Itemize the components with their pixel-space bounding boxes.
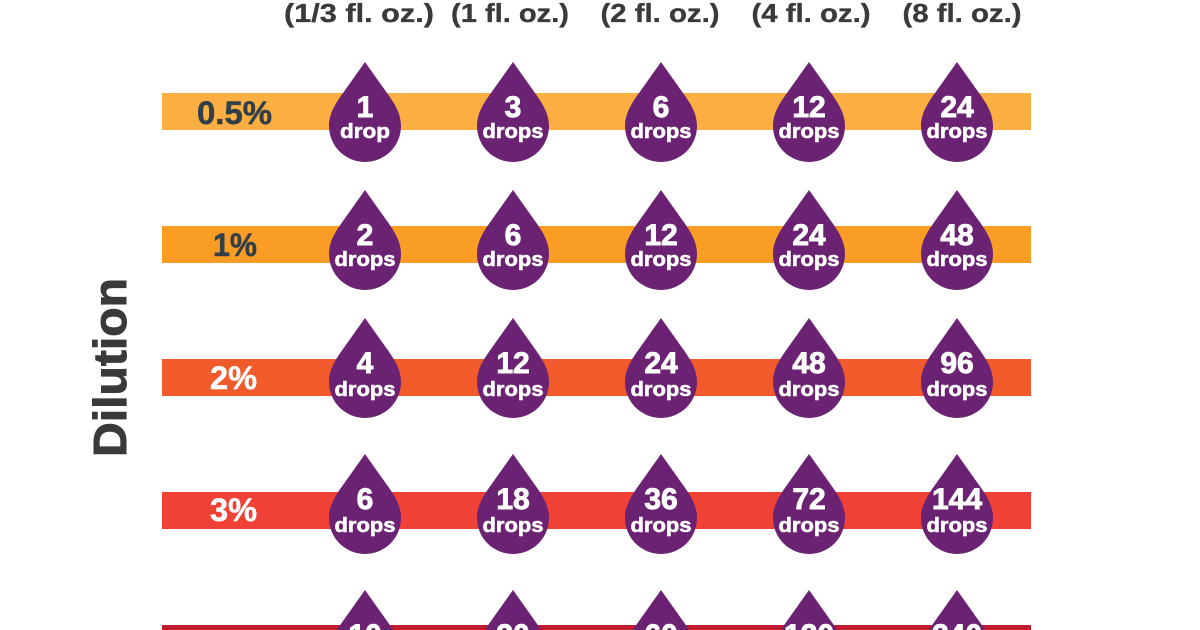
row: 1% dilution: 24 [792,219,826,252]
row: 3% dilution [162,454,1031,554]
row: 2% dilution: 12 [496,347,530,380]
row: 0.5% dilution [162,62,1031,162]
axis title: Dilution: Dilution [84,278,136,457]
row: 1% dilution: drops [334,249,396,271]
row: 0.5% dilution: 0.5% [197,95,272,131]
row: 2% dilution: 2% [210,360,257,396]
row: 2% dilution: 4 [357,347,374,380]
row: 3% dilution: 18 [496,483,530,516]
row: 0.5% dilution: drops [630,121,692,143]
row: 2% dilution: drops [630,379,692,401]
row: 1% dilution: 6 [505,219,521,252]
row: 2% dilution: drops [482,379,544,401]
row: 0.5% dilution: 12 [792,91,826,124]
row: 2% dilution: 96 [940,347,974,380]
row: 1% dilution: drops [482,249,544,271]
row: 2% dilution: drops [926,379,988,401]
row: 3% dilution: 72 [792,483,826,516]
row: 0.5% dilution: drops [778,121,840,143]
row: 3% dilution: drops [334,515,396,537]
row: 2% dilution: drops [334,379,396,401]
row: 1% dilution: 2 [357,219,373,252]
row: 3% dilution: 36 [644,483,678,516]
row: 0.5% dilution: 3 [505,91,521,124]
row: 1% dilution: 1% [213,227,257,263]
row: 0.5% dilution: drops [926,121,988,143]
row: 0.5% dilution: 1 [357,91,373,124]
row: 0.5% dilution: drop [340,121,390,143]
row: 0.5% dilution: drops [482,121,544,143]
row: 3% dilution: 6 [357,483,373,516]
row: 0.5% dilution: 6 [653,91,669,124]
row: 2% dilution [162,318,1031,418]
row: 1% dilution: 48 [940,219,974,252]
row: 2% dilution: drops [778,379,840,401]
row: 2% dilution: 48 [792,347,826,380]
row: 3% dilution: drops [926,515,988,537]
row: 2% dilution: 24 [644,347,678,380]
row: 1% dilution: drops [926,249,988,271]
row: 3% dilution: drops [482,515,544,537]
row: 3% dilution: 3% [210,492,257,528]
row: 1% dilution: 12 [644,219,678,252]
row: 3% dilution: drops [778,515,840,537]
row: 0.5% dilution: 24 [940,91,974,124]
row: 1% dilution [162,190,1031,290]
row: 5% dilution (cropped by the page edge) [162,590,1031,630]
row: 3% dilution: 144 [932,483,982,516]
row: 1% dilution: drops [630,249,692,271]
column headings [284,0,1022,28]
row: 3% dilution: drops [630,515,692,537]
row: 1% dilution: drops [778,249,840,271]
